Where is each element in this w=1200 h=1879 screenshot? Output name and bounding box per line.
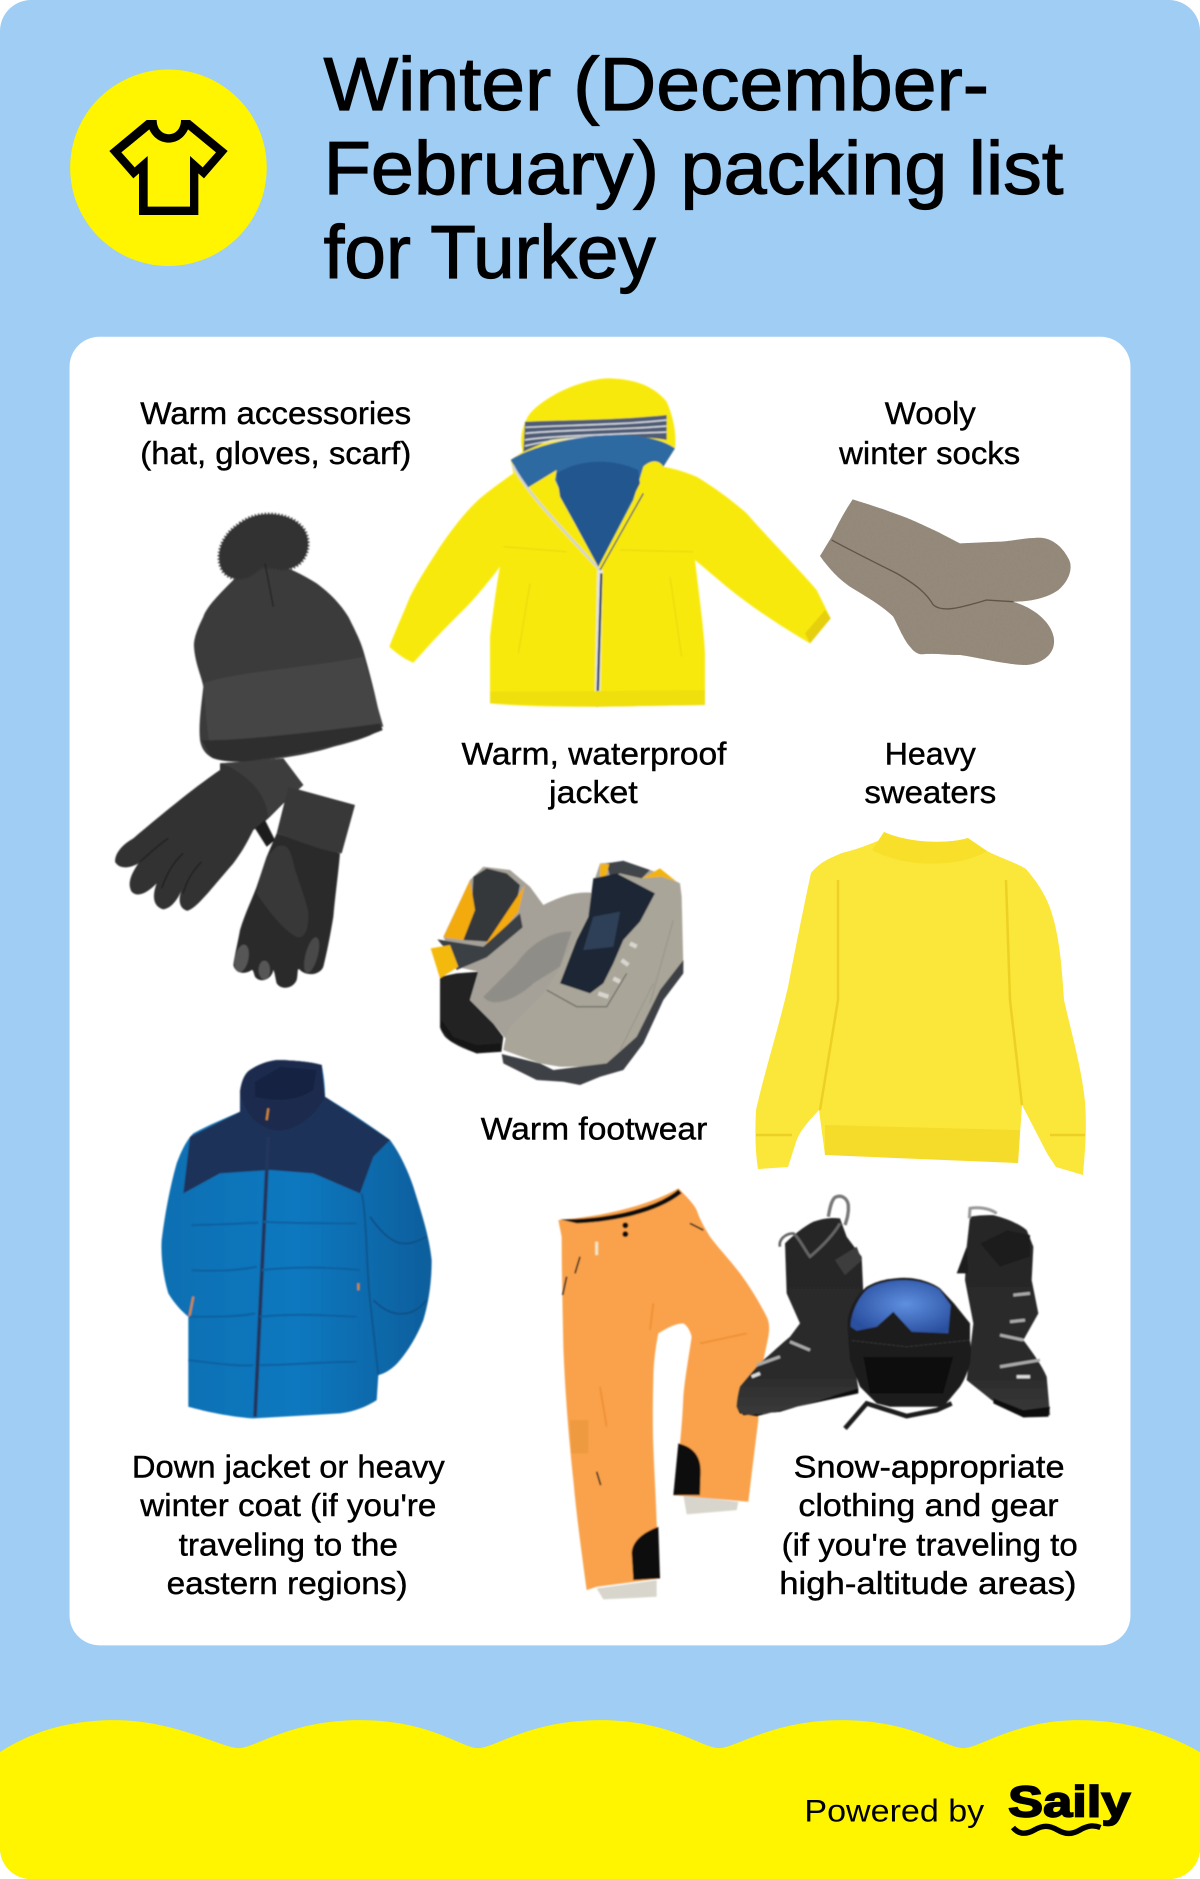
icon: wool socks <box>820 499 1071 665</box>
header <box>70 43 1063 295</box>
label: warm waterproof jacket <box>462 736 727 810</box>
label: heavy sweaters: Heavy <box>885 736 976 772</box>
label: snow-appropriate clothing and gear: clothing and gear <box>798 1487 1059 1523</box>
label: warm accessories <box>140 395 411 471</box>
icon: ski boots and helmet <box>737 1196 1050 1428</box>
label: warm waterproof jacket: jacket <box>548 774 638 810</box>
label: warm accessories: (hat, gloves, scarf) <box>140 435 411 471</box>
icon: hiking boots <box>431 861 683 1085</box>
label: down jacket or heavy winter coat <box>132 1449 445 1601</box>
label: wooly winter socks: winter socks <box>838 435 1020 471</box>
label: wooly winter socks <box>838 395 1020 471</box>
back boot <box>440 972 503 1053</box>
label: warm accessories: Warm accessories <box>140 395 411 431</box>
label: down jacket or heavy winter coat: winter coat (if you're <box>139 1487 436 1523</box>
title: February) packing list <box>324 127 1063 211</box>
panel: packing items <box>70 337 1130 1645</box>
label: warm footwear: Warm footwear <box>481 1111 708 1147</box>
title: for Turkey <box>324 211 656 295</box>
footer wave <box>0 1720 1200 1879</box>
title <box>324 43 1063 295</box>
icon: t-shirt in yellow circle <box>70 70 267 266</box>
label: wooly winter socks: Wooly <box>885 395 976 431</box>
label: down jacket or heavy winter coat: traveling to the <box>179 1526 398 1562</box>
icon: blue down jacket <box>161 1060 432 1418</box>
label: snow-appropriate clothing and gear: (if you're traveling to <box>782 1526 1078 1562</box>
icon: yellow waterproof jacket <box>389 378 831 707</box>
glove left <box>115 758 303 911</box>
label: heavy sweaters <box>864 736 996 810</box>
label: down jacket or heavy winter coat: eastern regions) <box>167 1565 408 1601</box>
label: snow-appropriate clothing and gear <box>779 1449 1078 1601</box>
label: warm waterproof jacket: Warm, waterproof <box>462 736 727 772</box>
glove right <box>233 833 340 988</box>
powered by text: Powered by <box>804 1792 984 1828</box>
icon: orange snow pants <box>558 1188 769 1599</box>
label: snow-appropriate clothing and gear: Snow-appropriate <box>794 1449 1065 1485</box>
logo: Saily: Saily <box>1008 1779 1130 1827</box>
title: Winter (December- <box>324 43 989 127</box>
label: heavy sweaters: sweaters <box>864 774 996 810</box>
front boot <box>503 862 683 1067</box>
icon: yellow sweater <box>755 832 1086 1175</box>
label: snow-appropriate clothing and gear: high-altitude areas) <box>779 1565 1077 1601</box>
icon: beanie hat and gloves <box>115 514 383 988</box>
label: down jacket or heavy winter coat: Down jacket or heavy <box>132 1449 445 1485</box>
